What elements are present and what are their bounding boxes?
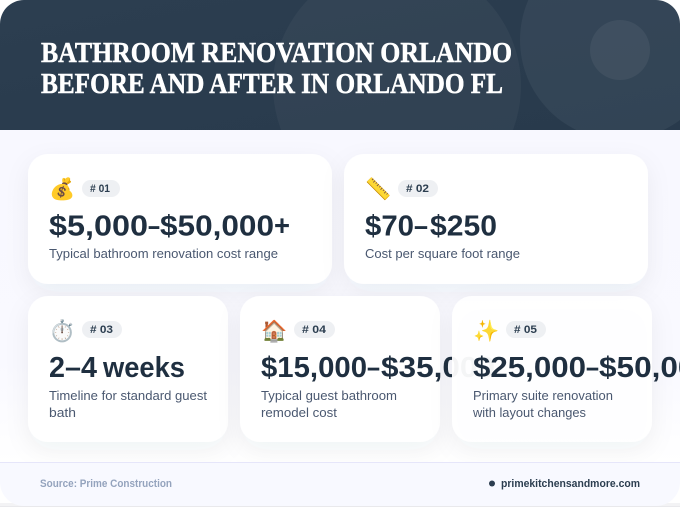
card 5: primary suite	[452, 296, 680, 442]
card 1: total cost: 💰	[49, 176, 75, 202]
card 3: timeline: bath	[49, 405, 76, 420]
card 3: timeline: 2–4	[49, 352, 97, 384]
card 4: guest bathroom: 🏠	[261, 319, 287, 344]
header banner	[0, 0, 680, 130]
card 5: primary suite: ✨	[473, 319, 499, 344]
card 2: cost per square foot: –	[414, 210, 428, 242]
source text: Source: Prime Construction	[40, 478, 172, 490]
card 4: guest bathroom: # 04	[302, 324, 327, 336]
card 4: guest bathroom: $35,000	[381, 352, 495, 384]
card 4: guest bathroom: –	[367, 352, 380, 384]
card 5: primary suite: with layout changes	[472, 405, 586, 420]
card 2: cost per square foot	[344, 176, 639, 290]
card 4: guest bathroom	[240, 296, 495, 442]
card 1: total cost: +	[274, 210, 290, 242]
card 1: total cost	[37, 177, 323, 290]
card 3: timeline: ⏱️	[49, 318, 75, 344]
card 3: timeline: # 03	[90, 324, 113, 336]
title: BATHROOM RENOVATION ORLANDO	[41, 37, 512, 69]
card 3: timeline: weeks	[102, 352, 185, 384]
card 3: timeline: Timeline for standard guest	[49, 388, 207, 403]
card 3: timeline	[28, 296, 228, 442]
card 2: cost per square foot: # 02	[406, 183, 429, 195]
card 5: primary suite: $25,000	[473, 352, 586, 384]
card 4: guest bathroom: $15,000	[261, 352, 367, 384]
card 1: total cost: $5,000	[49, 210, 148, 242]
card 1: total cost: $50,000	[160, 210, 274, 242]
card 5: primary suite: # 05	[514, 324, 537, 336]
card 1: total cost: –	[148, 210, 160, 242]
card 1: total cost: Typical bathroom renovation cost range	[49, 246, 278, 261]
title	[41, 42, 511, 94]
card 5: primary suite: Primary suite renovation	[473, 388, 613, 403]
card 2: cost per square foot: Cost per square foot range	[365, 246, 520, 261]
page background	[0, 130, 680, 463]
card 2: cost per square foot: 📏	[365, 176, 391, 202]
card 5: primary suite: –	[586, 352, 599, 384]
title: BEFORE AND AFTER IN ORLANDO FL	[41, 68, 503, 100]
card 4: guest bathroom: remodel cost	[261, 405, 337, 420]
card 1: total cost: # 01	[90, 183, 110, 195]
card 2: cost per square foot: $70	[365, 210, 414, 242]
footer	[0, 462, 680, 507]
website link: primekitchensandmore.com	[501, 478, 640, 490]
card 4: guest bathroom: Typical guest bathroom	[261, 388, 397, 403]
card 2: cost per square foot: $250	[430, 210, 497, 242]
